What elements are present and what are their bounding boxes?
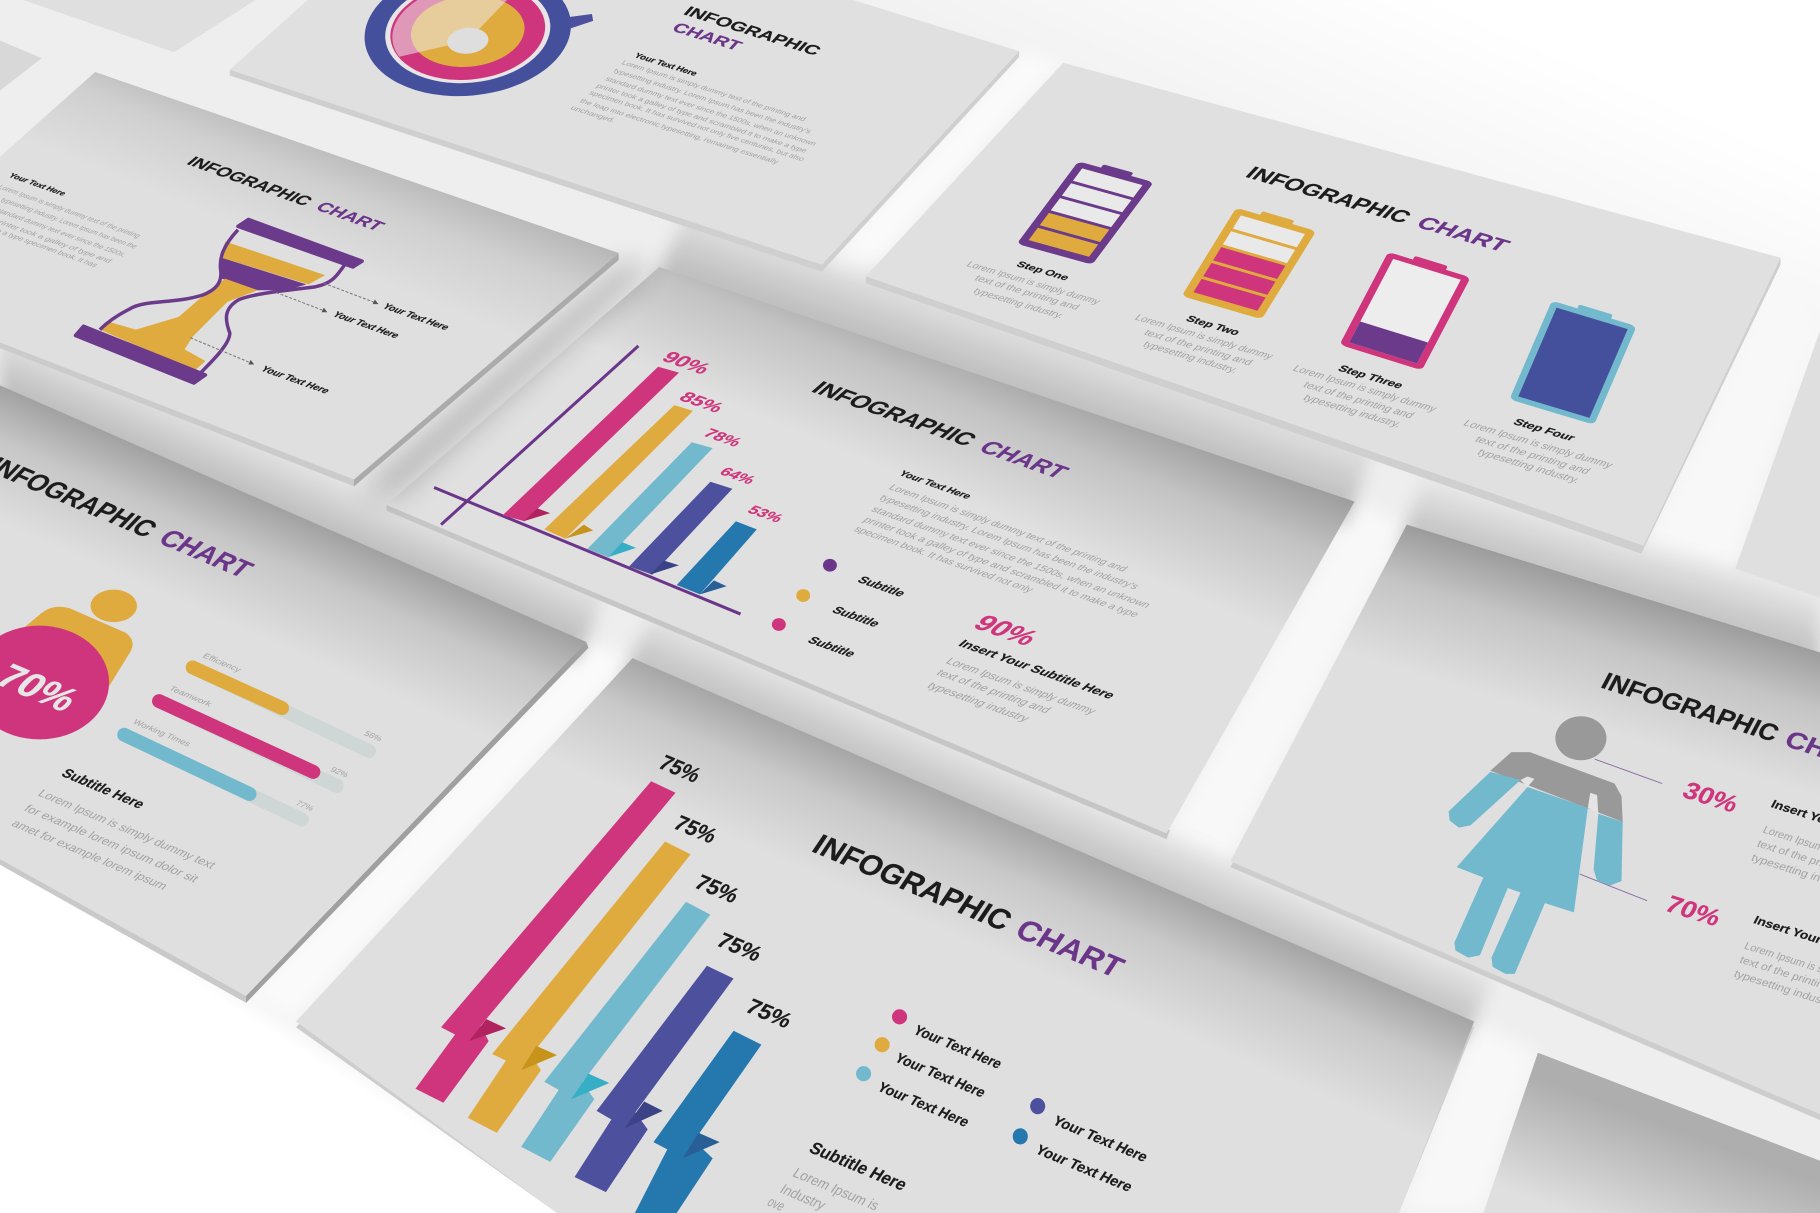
step two text: Step Two [1183,314,1242,338]
body text: printer took a galley of type and scrambled it to make a type [594,82,810,154]
title [1597,668,1820,781]
callout labels: Your Text Here [380,302,452,332]
title [0,453,259,583]
body text: typesetting industry. Lorem Ipsum has been the industry's [612,67,813,135]
subtitle and body text: amet for example lorem ipsum [9,817,171,892]
subtitle legend: Subtitle [829,604,884,629]
step three text: Lorem Ipsum is simply dummy [1290,363,1440,414]
body text: Lorem Ipsum is simply dummy text of the printing and [886,483,1130,574]
bar percentage labels [657,348,787,525]
subtitle and body text: Subtitle Here [805,1139,910,1195]
body text: Lorem Ipsum is simply dummy text of the printing and [620,59,808,123]
bar percentage labels: 75% [654,751,705,787]
title [806,829,1130,984]
body text [569,51,818,166]
body text: printer took a galley of type and scrambled it to make a type [860,516,1141,619]
panel: seventy percent person slide [0,385,588,1003]
body text: Your Text Here [633,51,700,77]
subtitle legend: Subtitle [855,574,909,599]
title: CHART [1412,213,1514,255]
title: INFOGRAPHIC [806,378,982,450]
subtitle and body text: Lorem Ipsum is simply dummy text [35,787,219,871]
panel: hourglass slide [0,72,619,486]
panel: main bar chart slide [387,267,1355,839]
subtitle and body text [764,1139,910,1213]
step one text: typesetting industry. [971,287,1066,320]
step two text: text of the printing and [1141,328,1255,368]
icon: hourglass [75,219,362,383]
title: INFOGRAPHIC [1597,668,1784,747]
title [806,378,1074,483]
side text blocks [1732,797,1820,1010]
bar labels: 77% [294,799,316,813]
title [1241,163,1514,255]
title: INFOGRAPHIC [1241,163,1416,227]
bar percentage labels: 75% [690,871,743,908]
body text: standard dummy text ever since the 1500s, when an unknown [604,75,818,147]
callout: 90 percent: 90% [967,610,1045,650]
callout: 90 percent [924,610,1119,724]
title: CHART [1009,914,1130,984]
bar percentage labels: 75% [669,812,721,848]
step four text: Lorem Ipsum is simply dummy [1461,417,1616,470]
bar percentage labels: 53% [744,503,787,525]
step three text: Step Three [1335,363,1407,391]
subtitle and body text [9,766,219,892]
panel: bottom right partial slide [1483,1053,1820,1213]
callout labels: Your Text Here [330,310,402,340]
bar percentage labels [654,751,797,1033]
bar percentage labels: 64% [716,465,759,487]
step two text: Lorem Ipsum is simply dummy [1132,313,1276,361]
title: CHART [668,19,747,54]
percentages [1661,777,1743,931]
panel: far right partial slide [1735,331,1820,598]
legend [856,1009,1151,1195]
panel: left partial slide [0,41,42,91]
body text: Your Text Here [7,172,68,197]
descending bars [503,367,757,594]
subtitle and body text: for example lorem ipsum dolor sit [21,802,202,885]
body text: Your Text Here [896,469,974,501]
callout labels: Your Text Here [258,365,332,395]
bar labels: 56% [362,729,384,743]
leader lines [1580,759,1662,901]
body text: typesetting industry. Lorem Ipsum has been the [0,196,140,250]
title [183,154,389,234]
legend: Your Text Here [910,1022,1005,1072]
title: CHART [312,199,389,234]
ribbon bars [416,781,761,1213]
bar percentage labels: 75% [712,929,766,966]
bar percentage labels: 75% [741,995,797,1033]
subtitle legend: Subtitle [805,635,859,659]
icon: battery two [1182,204,1318,319]
subtitle and body text: Subtitle Here [58,766,148,812]
subtitle legend [772,559,909,659]
bar percentage labels: 78% [699,426,746,449]
body text [851,469,1153,619]
chart axes [434,346,741,614]
body text: the leap into electronic typesetting, remaining essentially [578,97,782,166]
step four text: typesetting industry. [1475,447,1583,485]
bar labels: Teamwork [167,684,214,708]
step four text: Step Four [1511,416,1579,443]
percentages: 30% [1678,777,1743,818]
bar labels: Working Times [131,718,193,748]
step one text: Lorem Ipsum is simply dummy [964,260,1103,307]
title: INFOGRAPHIC [806,829,1018,937]
icon: battery one [1017,158,1156,265]
body text: unchanged. [569,104,617,124]
bar percentage labels: 90% [657,348,716,378]
legend: Your Text Here [1032,1142,1136,1195]
callout: 90 percent: Lorem Ipsum is simply dummy [943,655,1100,717]
step three text: text of the printing and [1300,379,1417,420]
panel: top left partial slide [23,0,255,52]
body text: specimen book. It has survived not only [851,525,1036,595]
panel: bottom ribbon bar chart slide [296,658,1474,1213]
progress bars [124,667,369,819]
callout: 90 percent: text of the printing and [933,667,1054,715]
bar labels [131,652,384,813]
body text: Lorem Ipsum is simply dummy text of the printing [0,183,143,239]
body text: specimen book. It has survived not only five centuries, but also [587,89,807,163]
body text [0,172,143,268]
step two text: typesetting industry. [1140,340,1240,375]
icon: battery four [1509,297,1638,425]
legend: Your Text Here [874,1079,972,1130]
icon: person with 70 percent badge [0,590,137,739]
icon: battery three [1339,248,1473,370]
callout labels [258,302,452,395]
body text: typesetting industry. Lorem Ipsum has been the industry's [877,494,1141,591]
bar labels: Efficiency [201,652,244,674]
title: INFOGRAPHIC [680,3,825,58]
callout: 90 percent: typesetting industry [924,680,1034,724]
step one text: Step One [1014,260,1071,283]
title: CHART [152,525,259,583]
percentages: 70% [1661,891,1726,931]
icon: woman figure [1449,716,1623,974]
title: INFOGRAPHIC [183,154,317,209]
panel: donut chart slide [230,0,1019,272]
step one text: text of the printing and [972,274,1082,312]
bar percentage labels: 85% [674,389,728,416]
body text: standard dummy text ever since the 1500s, when an unknown [868,505,1153,610]
step four text: text of the printing and [1472,434,1593,476]
legend: Your Text Here [1050,1113,1151,1165]
panel: woman percentage slide [1230,525,1820,1120]
callout: 90 percent: Insert Your Subtitle Here [955,637,1119,701]
panel: battery steps slide [866,63,1781,554]
icon: round target chart [326,0,609,118]
bar labels: 92% [328,765,351,779]
step three text: typesetting industry. [1300,392,1405,430]
legend: Your Text Here [892,1050,989,1101]
arrows [190,283,378,364]
title: CHART [973,437,1074,483]
